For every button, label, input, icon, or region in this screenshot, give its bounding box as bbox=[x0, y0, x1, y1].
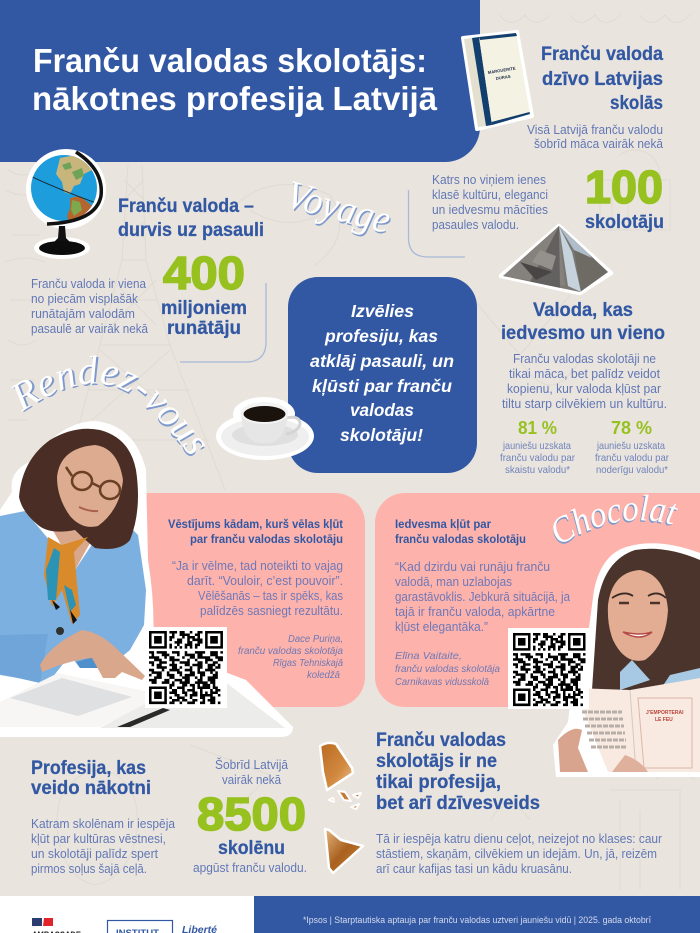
white sticker outline bbox=[0, 421, 293, 737]
neck bbox=[50, 525, 100, 570]
stat: 400 million: runātāju bbox=[167, 318, 241, 339]
stat: 78 percent: franču valodu par bbox=[595, 452, 669, 464]
text block: tikai māca, bet palīdz veidot bbox=[509, 367, 661, 381]
text block: un skolotāji palīdz spert bbox=[31, 847, 158, 861]
panel: language that inspires bbox=[500, 300, 669, 476]
attribution bbox=[238, 633, 343, 681]
quote text: tajā ir franču valoda, apkārtne bbox=[395, 605, 555, 619]
quote text: valodā, man uzlabojas bbox=[395, 575, 512, 589]
quote text: garastāvoklis. Jebkurā situācijā, ja bbox=[395, 590, 570, 604]
text block: no piecām visplašāk bbox=[31, 292, 139, 306]
hair bbox=[592, 549, 700, 690]
heading: Franču valodas bbox=[376, 730, 506, 751]
stat: 81 percent: 81 % bbox=[518, 418, 557, 438]
quote text: “Kad dzirdu vai runāju franču bbox=[395, 560, 550, 574]
icon: coffee cup bbox=[216, 397, 314, 460]
heading: skolotājs ir ne bbox=[376, 751, 497, 772]
footer logos strip bbox=[0, 896, 254, 933]
quote heading: Vēstījums kādam, kurš vēlas kļūt bbox=[168, 519, 343, 531]
hand bbox=[40, 630, 145, 680]
text block bbox=[502, 352, 667, 411]
shirt bbox=[620, 660, 700, 690]
text block: Visā Latvijā franču valodu bbox=[527, 123, 663, 137]
text block: Katrs no viņiem ienes bbox=[432, 173, 546, 187]
footer source panel bbox=[254, 896, 700, 933]
stat: 81 percent bbox=[500, 418, 575, 476]
text block: arī caur kafijas tasi un kādu kruasānu. bbox=[376, 862, 572, 876]
quote heading bbox=[168, 519, 343, 546]
heading: Profesija, kas bbox=[31, 758, 146, 779]
stat: 78 percent bbox=[595, 418, 669, 476]
text block bbox=[31, 817, 175, 876]
stat: 400 million: miljoniem bbox=[161, 298, 247, 319]
panel: title banner bbox=[0, 0, 480, 162]
attribution: Rīgas Tehniskajā bbox=[273, 657, 343, 669]
call to action text: skolotāju! bbox=[340, 425, 423, 445]
face bbox=[608, 570, 668, 661]
text block bbox=[376, 832, 662, 876]
stat: 8500 pupils: Šobrīd Latvijā bbox=[215, 757, 288, 772]
stat: 8500 pupils: skolēnu bbox=[218, 838, 285, 859]
stat: 81 percent: jauniešu uzskata bbox=[502, 440, 571, 452]
attribution: franču valodas skolotāja bbox=[238, 645, 343, 657]
stat: 8500 pupils: 8500 bbox=[197, 788, 306, 840]
attribution: Dace Puriņa, bbox=[288, 633, 343, 645]
heading bbox=[376, 730, 540, 814]
icon: pyramid bbox=[498, 222, 618, 296]
hands bbox=[558, 729, 588, 772]
heading bbox=[118, 196, 264, 241]
stat: 78 percent: jauniešu uzskata bbox=[596, 440, 665, 452]
text block: kļūt par kultūras vēstnesi, bbox=[31, 832, 166, 846]
hair bbox=[19, 429, 138, 549]
icon: book: DURAS bbox=[495, 74, 511, 81]
heading bbox=[31, 758, 151, 799]
cardigan bbox=[0, 511, 146, 683]
word art: Voyage: Voyage bbox=[282, 171, 396, 242]
title bbox=[32, 42, 438, 117]
quote text bbox=[172, 559, 343, 618]
heading bbox=[501, 300, 665, 344]
heading: Valoda, kas bbox=[533, 300, 633, 321]
icon: croissant pieces bbox=[320, 743, 363, 873]
word art: Rendez-vous: Rendez-vous bbox=[14, 357, 205, 456]
quote text: Vēlēšanās – tas ir spēks, kas bbox=[198, 589, 343, 603]
text block: Tā ir iespēja katru dienu ceļot, neizejot no klases: caur bbox=[376, 832, 662, 846]
heading: iedvesmo un vieno bbox=[501, 323, 665, 344]
heading: skolās bbox=[610, 93, 663, 114]
text block: Franču valoda ir viena bbox=[31, 277, 146, 291]
word art: Rendez-vous: Rendez-vous bbox=[12, 356, 205, 454]
word art: Voyage: Voyage bbox=[283, 173, 397, 244]
mouth bbox=[79, 507, 98, 511]
panel: central call to action bbox=[288, 277, 477, 473]
text block bbox=[432, 173, 548, 232]
book title: J’EMPORTERAI bbox=[646, 710, 684, 716]
text block: pirmos soļus šajā ceļā. bbox=[31, 862, 147, 876]
quote text: “Ja ir vēlme, tad noteikti to vajag bbox=[172, 559, 343, 573]
icon: book: MARGUERITE bbox=[487, 66, 516, 75]
logo: embassy bbox=[32, 918, 81, 933]
book title bbox=[646, 710, 684, 723]
cardigan sleeve bbox=[0, 634, 48, 683]
qr code left bbox=[145, 627, 227, 708]
stat: 400 million: 400 bbox=[163, 247, 245, 299]
stat: 78 percent: 78 % bbox=[611, 418, 652, 438]
source note: *Ipsos | Starptautiska aptauja par franču valodas uztveri jauniešu vidū | 2025. gada oktobrī bbox=[303, 915, 651, 926]
quote text: kļūst elegantāka.” bbox=[395, 620, 488, 634]
stat: 100 teachers: skolotāju bbox=[585, 212, 664, 233]
title: nākotnes profesija Latvijā bbox=[32, 80, 438, 117]
text block: Katram skolēnam ir iespēja bbox=[31, 817, 175, 831]
book edge bbox=[117, 708, 170, 727]
call to action text: atklāj pasauli, un bbox=[310, 351, 454, 371]
quote heading: par franču valodas skolotāju bbox=[190, 534, 343, 546]
photo: teacher Elīna bbox=[553, 543, 700, 777]
text block: un iedvesmu mācīties bbox=[432, 203, 548, 217]
face bbox=[57, 445, 123, 527]
panel: message quote bbox=[135, 493, 365, 707]
croissant piece bottom bbox=[325, 829, 363, 873]
call to action text: kļūsti par franču bbox=[312, 376, 452, 396]
text block: Franču valodas skolotāji ne bbox=[513, 352, 656, 366]
text block: pasaules valodu. bbox=[432, 218, 519, 232]
connector line left bbox=[180, 283, 266, 362]
quote text: palīdzēs sasniegt rezultātu. bbox=[200, 604, 343, 618]
text block: stāstiem, skaņām, cilvēkiem un idejām. Un, jā, reizēm bbox=[376, 847, 657, 861]
text block bbox=[31, 277, 148, 336]
attribution: Carnikavas vidusskolā bbox=[395, 676, 489, 688]
stat: 8500 pupils: apgūst franču valodu. bbox=[193, 861, 307, 875]
heading bbox=[541, 44, 663, 114]
attribution: Elīna Vaitaite, bbox=[395, 650, 462, 662]
icon: globe bbox=[26, 149, 106, 259]
open book bbox=[0, 673, 145, 727]
croissant piece top bbox=[320, 743, 353, 790]
book title: LE FEU bbox=[655, 717, 673, 723]
stat: 81 percent: skaistu valodu* bbox=[505, 464, 570, 476]
call to action text bbox=[310, 301, 454, 445]
attribution bbox=[395, 650, 500, 688]
quote heading bbox=[395, 519, 526, 546]
word art: Chocolat: Chocolat bbox=[553, 496, 676, 544]
quote heading: franču valodas skolotāju bbox=[395, 534, 526, 546]
button bbox=[56, 627, 64, 635]
panel: profession shaping future bbox=[31, 758, 175, 876]
call to action text: profesiju, kas bbox=[324, 326, 438, 346]
heading: Franču valoda bbox=[541, 44, 663, 65]
stat: 8500 pupils: vairāk nekā bbox=[222, 773, 281, 787]
attribution: franču valodas skolotāja bbox=[395, 663, 500, 675]
word art: Chocolat bbox=[553, 494, 678, 544]
text block: tiltu starp cilvēkiem un kultūru. bbox=[502, 397, 667, 411]
text block bbox=[527, 123, 663, 151]
panel: way of life bbox=[376, 730, 662, 876]
scarf bbox=[44, 537, 88, 624]
heading: veido nākotni bbox=[31, 778, 151, 799]
text block: runātajām valodām bbox=[31, 307, 135, 321]
stat: 8500 pupils bbox=[193, 757, 307, 875]
photo: teacher Dace bbox=[0, 421, 293, 737]
text block: pasaulē ar vairāk nekā bbox=[31, 322, 148, 336]
open book bbox=[574, 678, 700, 772]
white sticker outline bbox=[553, 543, 700, 777]
attribution: koledžā bbox=[307, 669, 340, 681]
stat: 78 percent: noderīgu valodu* bbox=[596, 464, 668, 476]
call to action text: valodas bbox=[350, 400, 414, 420]
quote heading: Iedvesma kļūt par bbox=[395, 519, 492, 531]
word art: Chocolat: Chocolat bbox=[553, 494, 678, 542]
panel: inspiration quote bbox=[375, 493, 700, 707]
table bbox=[100, 684, 285, 728]
text block: šobrīd māca vairāk nekā bbox=[534, 137, 663, 151]
heading: bet arī dzīvesveids bbox=[376, 793, 540, 814]
quote text: darīt. “Vouloir, c’est pouvoir”. bbox=[187, 574, 343, 588]
call to action text: Izvēlies bbox=[351, 301, 414, 321]
croissant crumbs bbox=[329, 791, 361, 809]
stat: 400 million bbox=[161, 247, 247, 339]
connector line right bbox=[408, 190, 465, 257]
glasses bbox=[66, 467, 120, 499]
stat: 81 percent: franču valodu par bbox=[500, 452, 575, 464]
qr code right bbox=[508, 628, 589, 709]
text block: kopienu, kur valoda kļūst par bbox=[507, 382, 661, 396]
quote text bbox=[395, 560, 570, 634]
icon: book bbox=[463, 32, 532, 129]
text block: klasē kultūru, eleganci bbox=[432, 188, 548, 202]
panel: French lives in Latvian schools bbox=[432, 44, 664, 233]
panel: French door to the world bbox=[31, 196, 264, 339]
stat: 100 teachers: 100 bbox=[585, 161, 663, 213]
heading: durvis uz pasauli bbox=[118, 220, 264, 241]
heading: dzīvo Latvijas bbox=[542, 69, 663, 90]
title: Franču valodas skolotājs: bbox=[33, 42, 427, 79]
logo: institut bbox=[108, 920, 172, 933]
heading: tikai profesija, bbox=[376, 772, 501, 793]
heading: Franču valoda – bbox=[118, 196, 254, 217]
